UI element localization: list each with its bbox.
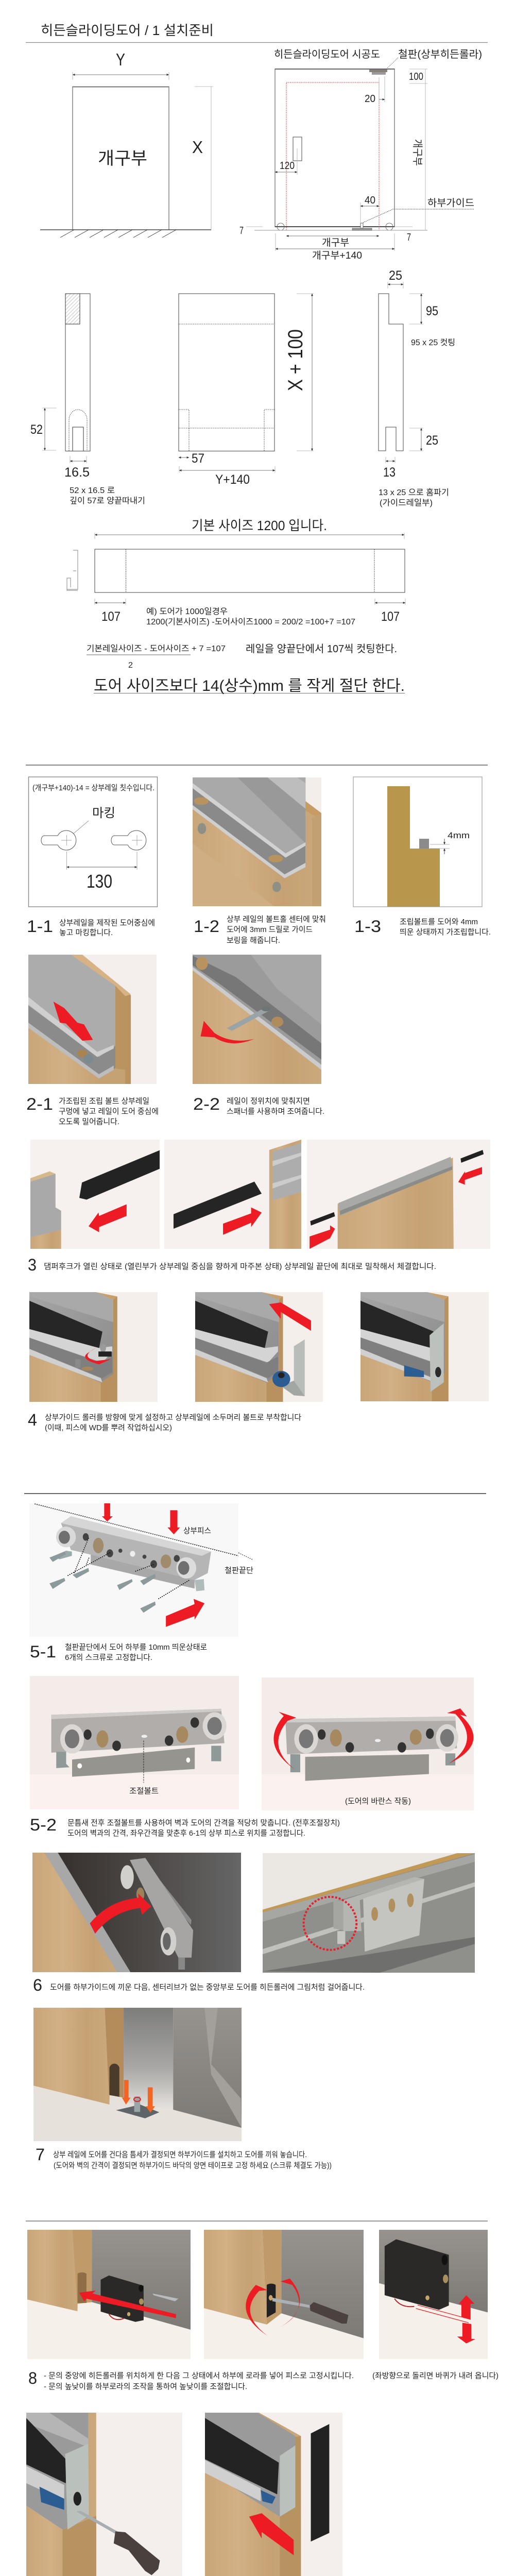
- diagram: hidden sliding door construction: 100: [409, 71, 423, 82]
- icon: bottom guide: [352, 223, 372, 230]
- arrow: slide double: [54, 1002, 93, 1041]
- step 2-1 caption: 2-1: [26, 1095, 53, 1113]
- image 2-1: sliding the rail: [28, 955, 157, 1084]
- arrow: right end: [458, 1167, 482, 1185]
- image 9: guide roller adjust with screwdriver: [26, 2413, 182, 2576]
- image 6b: roller on the rail detail: [263, 1853, 475, 1973]
- step 5-2 caption: 5-2: [30, 1816, 57, 1834]
- step 6 caption: [33, 1976, 365, 1994]
- step 7 caption: (도어와 벽의 간격이 결정되면 하부가이드 바닥의 양면 테이프로 고정 하세요 (스크류 체결도 가능)): [54, 2161, 332, 2170]
- arrow: left end: [310, 1225, 335, 1249]
- diagram: opening X by Y: X: [192, 138, 203, 157]
- panel 1-1: marking: 130: [87, 871, 112, 892]
- step 2-2 caption: [193, 1095, 324, 1116]
- callout: red dotted circle: [304, 1897, 356, 1950]
- image 4c: roller assembled: [360, 1292, 489, 1401]
- arrow: orange right: [146, 2088, 155, 2113]
- diagram: rail cut dimensions: 107: [381, 609, 400, 624]
- step 5-1 caption: [30, 1642, 207, 1662]
- step 5-2 caption: [30, 1816, 340, 1838]
- image 7: bottom guide installation: [33, 2008, 242, 2141]
- step 5-1 caption: 5-1: [30, 1642, 56, 1661]
- icon: screws: [49, 1552, 156, 1613]
- arrow: top left: [102, 1502, 113, 1521]
- arrow: up-left: [249, 2513, 294, 2555]
- step 7 caption: [36, 2145, 332, 2170]
- step 5-1 caption: 철판끝단에서 도어 하부를 10mm 띄운상태로: [65, 1643, 207, 1652]
- step 2-1 caption: 오도록 밀어줍니다.: [59, 1117, 119, 1126]
- step 1-1 caption: 1-1: [27, 917, 53, 936]
- diagram: hidden sliding door construction: 개구부+140: [312, 250, 362, 261]
- diagram: hidden sliding door construction: 7: [239, 225, 244, 236]
- diagram: door panel X+100 by Y+140: [179, 294, 314, 487]
- icon: spanner: [229, 1007, 271, 1029]
- diagram: door panel X+100 by Y+140: 57: [192, 451, 204, 466]
- label: 도어의 바란스 작동: (도어의 바란스 작동): [345, 1797, 411, 1806]
- step 6 caption: 도어를 하부가이드에 끼운 다음, 센터리브가 없는 중앙부로 도어를 히든롤러에 그림처럼 걸어줍니다.: [50, 1983, 365, 1992]
- image 5-1: hidden roller mounting: [35, 1503, 238, 1627]
- step 5-2 caption: 도어의 벽과의 간격, 좌우간격을 맞춘후 6-1의 상부 피스로 위치를 고정합니다.: [67, 1829, 305, 1838]
- step 3 caption: [28, 1256, 436, 1274]
- image 5-2a: adjust bolt: [30, 1676, 239, 1809]
- step 5-1 caption: 6개의 스크류로 고정합니다.: [65, 1653, 152, 1662]
- diagram: hidden sliding door construction: 히든슬라이딩도어 시공도: [274, 48, 380, 60]
- image 4b: attach guide roller: [195, 1292, 323, 1402]
- panel 1-1: marking: 마킹: [92, 806, 115, 820]
- diagram: hidden sliding door construction: 하부가이드: [427, 197, 474, 209]
- step 8 caption: - 문의 높낮이를 하부로라의 조작을 통하여 높낮이를 조절합니다.: [44, 2382, 247, 2391]
- step 1-2 caption: 도어에 3mm 드릴로 가이드: [227, 925, 313, 934]
- icon: steel plate roller: [369, 70, 387, 75]
- step 2-2 caption: 레일이 정위치에 맞춰지면: [227, 1097, 310, 1106]
- diagram: rail cut dimensions: 기본레일사이즈 - 도어사이즈 + 7 =107: [87, 644, 226, 653]
- step 1-3 caption: 조립볼트를 도어와 4mm: [400, 918, 478, 926]
- diagram: rail cut dimensions: 107: [101, 609, 121, 624]
- diagram: rail cut dimensions: 도어 사이즈보다 14(상수)mm 를 작게 절단 한다.: [94, 677, 405, 694]
- step 1-1 caption: [27, 917, 155, 937]
- step 4 caption: 상부가이드 롤러를 방향에 맞게 설정하고 상부레일에 소두머리 볼트로 부착합니다: [45, 1413, 301, 1422]
- diagram: rail cut dimensions: 1200(기본사이즈) -도어사이즈1000 = 200/2 =100+7 =107: [146, 617, 355, 626]
- image 6a: hanging door on roller: [32, 1853, 241, 1972]
- step 1-2 caption: 보링을 해줍니다.: [227, 936, 280, 945]
- image 10: closing cap: [205, 2413, 342, 2576]
- diagram: hidden sliding door construction: 120: [280, 160, 295, 172]
- arrow: lower right: [166, 1599, 204, 1627]
- dotted plate end line: [238, 1553, 252, 1560]
- arrow: curved onto roller: [90, 1893, 151, 1934]
- panel 1-3: 4mm gap section: [353, 777, 482, 907]
- diagram: left door edge cut: 깊이 57로 양끝따내기: [70, 496, 145, 505]
- step 3 caption: 댐퍼후크가 열린 상태로 (열린부가 상부레일 중심을 향하게 마주본 상태) 상부레일 끝단에 최대로 밀착해서 체결합니다.: [44, 1262, 436, 1271]
- diagram: left door edge cut: 52 x 16.5 로: [70, 486, 115, 495]
- image 3b: damper hook right: [164, 1140, 301, 1249]
- arrow: up: [459, 2295, 474, 2320]
- arrow: right balance arc: [447, 1708, 473, 1764]
- step 8 caption: 8: [28, 2369, 37, 2387]
- label: 철판끝단: 철판끝단: [225, 1566, 253, 1575]
- step 8 caption: - 문의 중앙에 히든롤러를 위치하게 한 다음 그 상태에서 하부에 로라를 넣어 피스로 고정시킵니다.: [44, 2371, 354, 2380]
- diagram: right door edge cut: [379, 268, 455, 507]
- image 3a: damper hook left: [30, 1140, 160, 1249]
- diagram: right door edge cut: 13 x 25 으로 홈파기: [379, 488, 449, 497]
- diagram: right door edge cut: 25: [389, 268, 402, 283]
- title: 히든슬라이딩도어 / 1 설치준비: 히든슬라이딩도어 / 1 설치준비: [41, 23, 214, 38]
- step 1-3 caption: 띄운 상태까지 가조립합니다.: [400, 928, 491, 937]
- panel 1-3: 4mm gap section: 4mm: [448, 831, 470, 840]
- diagram: rail cut dimensions: 레일을 양끝단에서 107씩 컷팅한다.: [246, 643, 397, 655]
- diagram: door panel X+100 by Y+140: X + 100: [284, 329, 307, 391]
- image 8a: bottom roller placed: [27, 2230, 191, 2359]
- step 3 caption: 3: [28, 1256, 37, 1274]
- diagram: opening X by Y: [40, 50, 213, 238]
- step 4 caption: [28, 1411, 301, 1432]
- image 8c: wheel height: [379, 2230, 488, 2359]
- step 8 caption: [28, 2369, 499, 2391]
- arrow: up-left: [269, 1302, 311, 1331]
- step 1-1 caption: 상부레일을 제작된 도어중심에: [59, 919, 155, 927]
- step 1-2 caption: [194, 915, 326, 945]
- diagram: right door edge cut: 95 x 25 컷팅: [411, 338, 455, 347]
- icon: guide roller bracket: [272, 1340, 305, 1396]
- panel 1-1: marking: [29, 777, 158, 907]
- diagram: right door edge cut: (가이드레일부): [380, 498, 433, 507]
- panel 1-1: marking: (개구부+140)-14 = 상부레일 칫수입니다.: [32, 784, 154, 792]
- label: 상부피스: 상부피스: [183, 1527, 211, 1535]
- arrow: curved bolt: [85, 1348, 111, 1364]
- diagram: left door edge cut: [30, 294, 145, 505]
- step 1-2 caption: 상부 레일의 볼트홀 센터에 맞춰: [227, 915, 326, 924]
- diagram: rail cut dimensions: 2: [128, 661, 133, 670]
- diagram: door panel X+100 by Y+140: Y+140: [215, 472, 250, 487]
- arrow: long insertion: [79, 2291, 176, 2318]
- step 2-1 caption: [26, 1095, 159, 1126]
- diagram: opening X by Y: 개구부: [98, 149, 147, 168]
- step 1-2 caption: 1-2: [194, 917, 219, 936]
- step 2-2 caption: 2-2: [193, 1095, 220, 1113]
- diagram: hidden sliding door construction: 7: [407, 232, 411, 243]
- diagram: left door edge cut: 52: [30, 422, 43, 437]
- diagram: hidden sliding door construction: 개구부: [411, 139, 423, 166]
- image 8b: height adjusting: [204, 2230, 364, 2359]
- diagram: right door edge cut: 25: [426, 433, 438, 448]
- image 1-2: rail on door: [193, 777, 321, 906]
- arrow: top right: [167, 1510, 180, 1534]
- arrow: to the right: [223, 1207, 262, 1235]
- diagram: left door edge cut: 16.5: [64, 465, 90, 480]
- diagram: hidden sliding door construction: 철판(상부히든롤라): [398, 48, 482, 60]
- diagram: rail cut dimensions: [67, 518, 405, 694]
- step 4 caption: (이때, 피스에 WD를 뿌려 작업하십시오): [45, 1423, 172, 1432]
- step 4 caption: 4: [28, 1411, 37, 1429]
- icon: black cap: [311, 2424, 329, 2541]
- diagram: hidden sliding door construction: 40: [365, 195, 375, 206]
- arrow: to the left: [89, 1204, 127, 1232]
- diagram: hidden sliding door construction: [239, 48, 482, 261]
- image 5-2b: door balance: [262, 1677, 474, 1810]
- diagram: rail cut dimensions: 기본 사이즈 1200 입니다.: [192, 518, 327, 533]
- icon: screwdriver handle: [114, 2531, 160, 2575]
- step 2-1 caption: 구멍에 넣고 레일이 도어 중심에: [59, 1107, 159, 1116]
- arrow: down: [457, 2323, 475, 2344]
- diagram: right door edge cut: 13: [383, 465, 396, 480]
- step 2-1 caption: 가조립된 조립 볼트 상부레일: [59, 1097, 149, 1106]
- step 7 caption: 상부 레일에 도어를 건다음 틈세가 결정되면 하부가이드를 설치하고 도어를 끼워 놓습니다.: [53, 2150, 307, 2159]
- label: 조절볼트: 조절볼트: [129, 1787, 159, 1795]
- step 6 caption: 6: [33, 1976, 42, 1994]
- diagram: right door edge cut: 95: [426, 304, 438, 318]
- icon: rail profile: [67, 550, 78, 590]
- arrow: rotation right: [281, 2279, 300, 2327]
- step 7 caption: 7: [36, 2145, 45, 2164]
- arrow: rotation left: [246, 2285, 267, 2336]
- diagram: hidden sliding door construction: 개구부: [322, 237, 349, 248]
- arrow: curved tighten: [200, 1021, 254, 1043]
- diagram: opening X by Y: Y: [116, 50, 125, 69]
- diagram: hidden sliding door construction: 20: [365, 93, 375, 105]
- step 5-2 caption: 문틈새 전후 조절볼트를 사용하여 벽과 도어의 간격을 적당히 맞춥니다. (전후조절장치): [67, 1819, 340, 1827]
- step 2-2 caption: 스패너를 사용하며 조여줍니다.: [227, 1107, 324, 1116]
- diagram: rail cut dimensions: 예) 도어가 1000일경우: [146, 607, 228, 616]
- image 3c: caps on both rail ends: [307, 1140, 490, 1249]
- step 1-1 caption: 놓고 마킹합니다.: [59, 928, 113, 937]
- step 1-3 caption: 1-3: [354, 917, 381, 936]
- arrow: orange left: [122, 2080, 131, 2105]
- image 4a: roller bolt position: [29, 1292, 158, 1402]
- arrow: left balance arc: [273, 1712, 296, 1770]
- step 8 caption: (좌방향으로 돌리면 바퀴가 내려 옵니다): [372, 2371, 499, 2380]
- image 2-2: tighten with spanner: [193, 955, 321, 1084]
- step 1-3 caption: [354, 917, 491, 937]
